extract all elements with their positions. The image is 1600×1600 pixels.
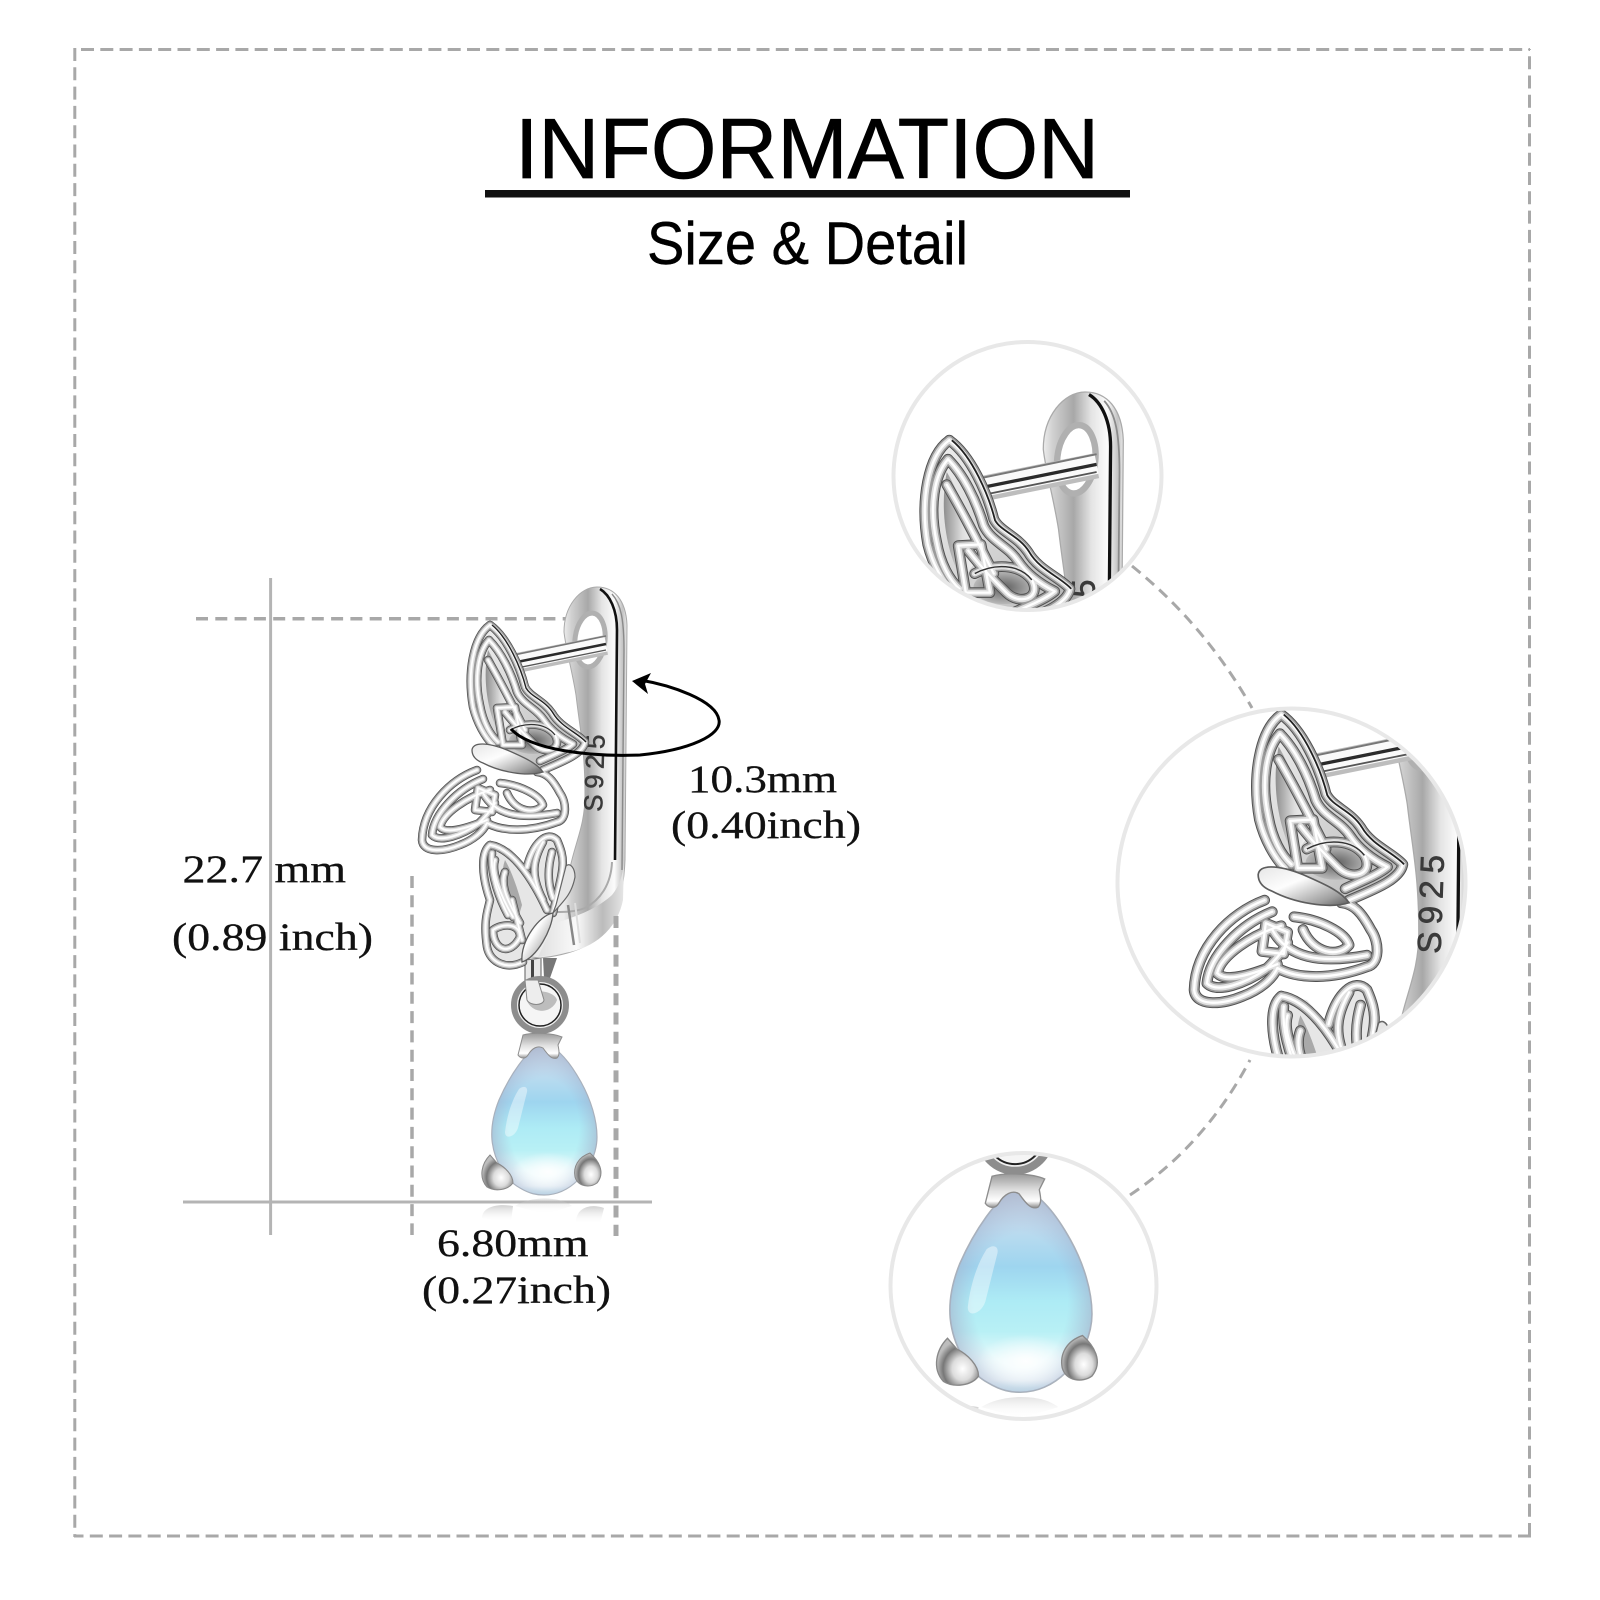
title underline: [485, 190, 1130, 198]
detail circle: clasp: [892, 340, 1164, 612]
label: hoop width: [671, 758, 861, 847]
main earring illustration: [422, 587, 627, 1224]
label: stone width: (0.27inch): [422, 1269, 611, 1312]
detail circle: butterfly: [1116, 706, 1468, 1058]
detail circle: moonstone: [888, 1151, 1158, 1421]
icon: rotation arrow: [511, 673, 719, 755]
dimension guide lines: [183, 578, 652, 1235]
subtitle: Size & Detail: [647, 210, 968, 277]
label: total height: (0.89 inch): [172, 916, 373, 959]
width guide line: [614, 916, 618, 1236]
label: total height: [172, 848, 373, 959]
title: INFORMATION: [515, 102, 1099, 197]
dashed connector arcs: [1130, 566, 1252, 1195]
label: stone width: 6.80mm: [437, 1222, 588, 1265]
label: hoop width: 10.3mm: [688, 758, 837, 801]
label: total height: 22.7 mm: [182, 848, 346, 891]
label: hoop width: (0.40inch): [671, 804, 861, 847]
label: stone width: [422, 1222, 611, 1312]
